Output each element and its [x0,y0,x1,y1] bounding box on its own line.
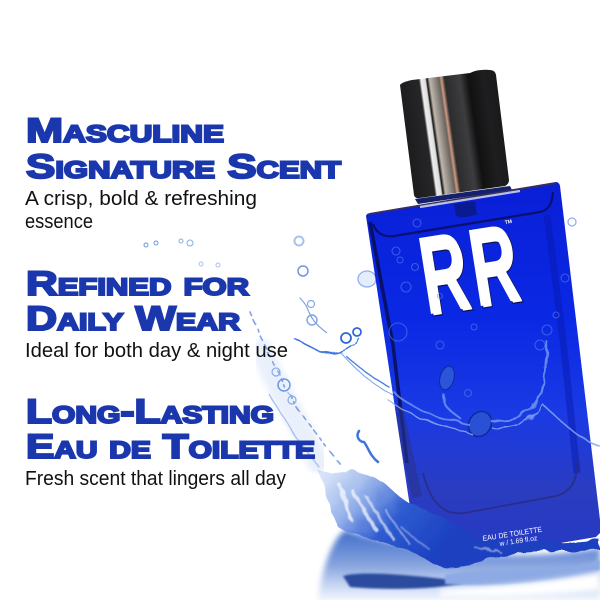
trademark mark: TM [504,219,512,226]
text: crisp bold essence: essence [25,211,93,233]
RR logo: R [414,213,479,341]
RR logo [412,202,528,341]
heading: refined for daily wear: Refined for [26,265,249,303]
heading: long-lasting eau de toilette [26,393,315,466]
bottle label text: w / 1.69 fl.oz [498,535,538,548]
water veins across bottle [388,342,600,446]
water crown at bottle base [318,470,600,567]
heading: masculine signature scent [26,112,341,186]
RR logo: R [412,210,476,338]
large droplets on glass [437,365,496,441]
RR logo: R [464,205,528,333]
perfume bottle [366,70,600,566]
text: crisp bold essence [25,188,257,233]
heading: masculine signature scent: Signature Scent [26,148,341,186]
bottle glass [366,182,600,566]
pool of water [318,530,600,600]
heading: long-lasting eau de toilette: Long-Lasting [26,393,274,431]
heading: long-lasting eau de toilette: Eau de Toilette [26,428,315,466]
bottle label text: EAU DE TOILETTE [482,525,543,543]
heading: refined for daily wear [26,265,249,338]
bottle cap [400,70,512,204]
text: crisp bold essence: A crisp, bold & refreshing [25,188,257,210]
RR logo: R [462,202,526,330]
heading: masculine signature scent: Masculine [26,112,224,150]
water splash arc left of bottle [144,218,576,468]
droplets on glass [389,219,569,396]
heading: refined for daily wear: Daily Wear [26,300,240,338]
text: day and night use: Ideal for both day & night use [25,340,288,362]
text: fresh scent: Fresh scent that lingers all day [25,468,286,490]
glass edge highlights [367,183,577,513]
